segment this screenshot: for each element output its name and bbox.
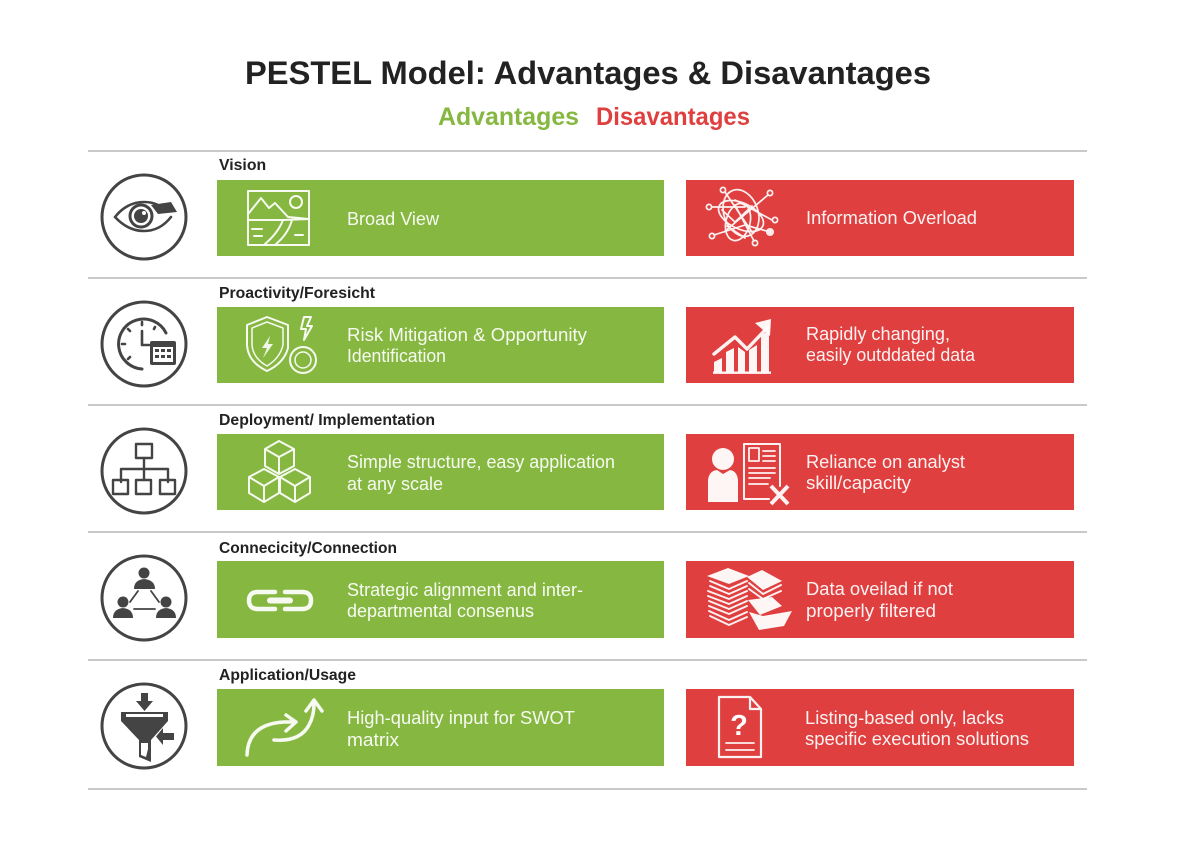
panel: Risk Mitigation (217, 307, 664, 383)
text: Information Overload: Information Overload (806, 207, 977, 228)
icon: clock and calendar (102, 302, 186, 386)
icon: document with question mark: ? (730, 710, 748, 742)
panel: Risk Mitigation: Identification (347, 345, 446, 366)
panel: Information Overload (686, 180, 1074, 256)
panel: Data overload (686, 561, 1074, 638)
icon: funnel with arrows (102, 684, 186, 768)
text: High-quality input: High-quality input for SWOT (347, 707, 575, 728)
panel: High-quality input (217, 689, 664, 766)
text: Listing-based: Listing-based only, lacks (805, 707, 1004, 728)
row: Proactivity/Foresight (102, 285, 1074, 386)
icon: person and document with cross (708, 444, 788, 504)
icon: tangled network (706, 185, 778, 246)
icon: cubes (249, 441, 310, 502)
panel: Broad View (217, 180, 664, 256)
icon: org chart (102, 429, 186, 513)
panel: Strategic alignment (217, 561, 664, 638)
panel: Reliance on analyst (686, 434, 1074, 510)
row: Connectivity/Connection (102, 540, 1074, 640)
heading: Connecicity/Connection: Connecicity/Connection (219, 540, 397, 557)
text: Strategic alignment: Strategic alignment and inter- (347, 579, 583, 600)
icon: rising chart (713, 319, 771, 374)
icon: shield and bolt (247, 317, 316, 373)
panel: Simple structure (217, 434, 664, 510)
panel: Simple structure: at any scale (347, 473, 443, 494)
row: Application/Usage (102, 667, 1074, 768)
legend: advantages and disadvantages: Advantages (438, 103, 579, 131)
heading: Proactivity/Foresicht: Proactivity/Foresicht (219, 285, 376, 302)
title: PESTEL Model: Advantages & Disavantages (245, 54, 931, 91)
icon: curved arrows (247, 700, 322, 755)
panel: Data overload: properly filtered (806, 600, 936, 621)
text: Risk Mitigation & Opportunity Identification: Risk Mitigation & Opportunity (347, 324, 588, 345)
panel: Rapidly changing (686, 307, 1074, 383)
icon: landscape (248, 191, 309, 245)
heading: Vision: Vision (219, 157, 266, 174)
panel: Listing-based (686, 689, 1074, 766)
panel: Listing-based: specific execution solutions (805, 728, 1029, 749)
panel: High-quality input: matrix (347, 729, 399, 750)
heading: Application/Usage: Application/Usage (219, 667, 356, 684)
legend: advantages and disadvantages (438, 103, 750, 131)
icon: paper stacks (707, 568, 792, 630)
text: Rapidly changing: Rapidly changing, (806, 323, 950, 344)
icon: connected people (102, 556, 186, 640)
panel: Rapidly changing: easily outddated data (806, 344, 976, 365)
text: Data overload: Data oveilad if not (806, 578, 953, 599)
heading: Deployment/ Implementation: Deployment/ Implementation (219, 412, 435, 429)
row: Deployment/Implementation (102, 412, 1074, 513)
text: Simple structure: Simple structure, easy application (347, 451, 615, 472)
legend: advantages and disadvantages: Disavantages (596, 103, 750, 131)
panel: Reliance on analyst: skill/capacity (806, 472, 912, 493)
text: Broad View: Broad View (347, 208, 440, 229)
icon: document with question mark (719, 697, 761, 757)
icon: chain link (249, 592, 311, 609)
icon: eye (102, 175, 186, 259)
panel: Strategic alignment: departmental consenus (347, 600, 534, 621)
row: Vision (102, 157, 1074, 259)
text: Reliance on analyst: Reliance on analyst (806, 451, 965, 472)
